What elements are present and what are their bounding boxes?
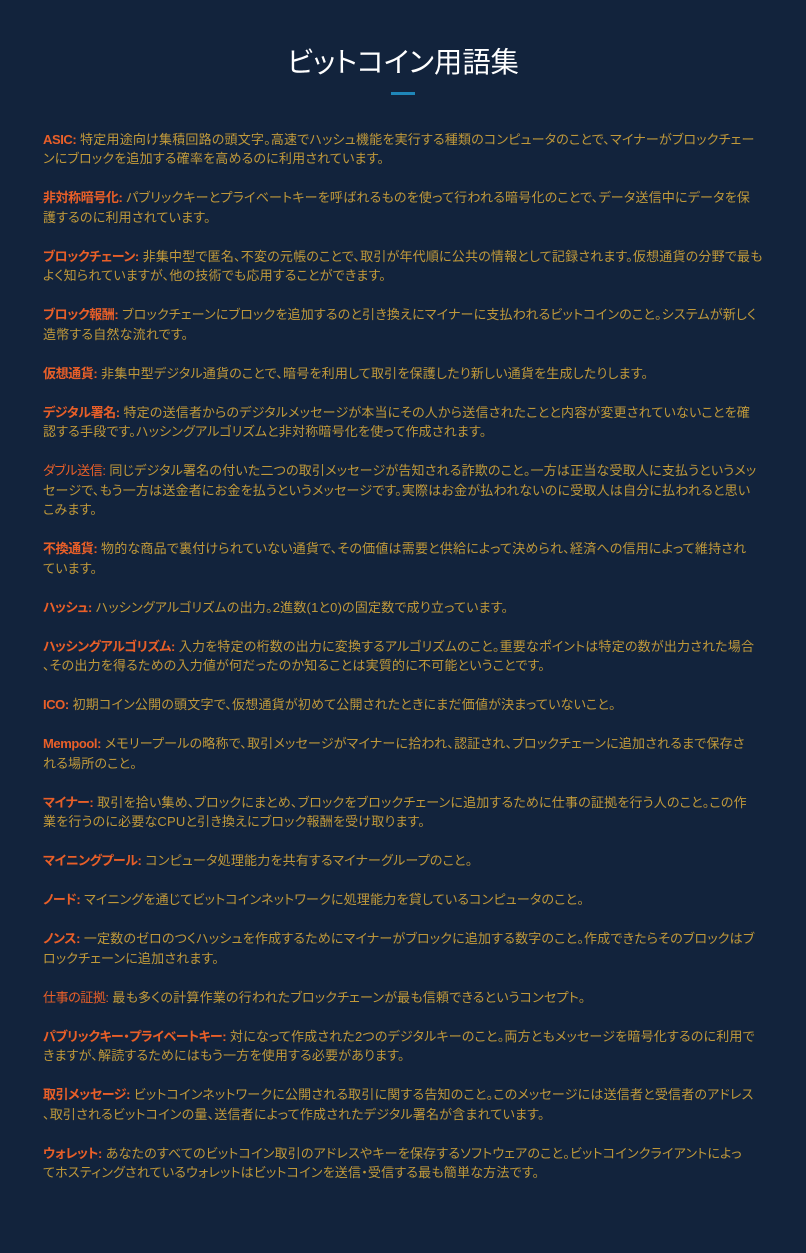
entry: Mempool: Mempool: メモリープールの略称で、取引メッセージがマイナーに拾われ、認証され、ブロックチェーンに追加されるまで保存さ	[43, 736, 745, 751]
entry: ASIC	[43, 132, 755, 166]
entry: ブロック報酬: ブロック報酬: ブロックチェーンにブロックを追加するのと引き換えにマイナーに支払われるビットコインのこと。システムが新しく	[43, 307, 756, 322]
entry: ウォレット	[43, 1146, 742, 1180]
entry: 不換通貨	[43, 541, 746, 576]
entry: パブリックキー・プライベートキー	[43, 1029, 755, 1063]
entry: デジタル署名	[43, 405, 750, 439]
entry: パブリックキー・プライベートキー: パブリックキー・プライベートキー: 対になって作成された2つのデジタルキーのこと。両方ともメッセージを暗号化するのに利用で	[43, 1029, 755, 1044]
entry: 仕事の証拠: 仕事の証拠: 最も多くの計算作業の行われたブロックチェーンが最も信頼できるというコンセプト。	[43, 990, 585, 1005]
entry: ハッシングアルゴリズム: 、その出力を得るための入力値が何だったのか知ることは実質的に不可能ということです。	[43, 658, 545, 673]
entry: Mempool	[43, 736, 745, 771]
entry: ノンス: ノンス: 一定数のゼロのつくハッシュを作成するためにマイナーがブロックに追加する数字のこと。作成できたらそのブロックはブ	[43, 931, 754, 946]
entry: ダブル送信: ダブル送信: 同じデジタル署名の付いた二つの取引メッセージが告知される詐欺のこと。一方は正当な受取人に支払うというメッ	[43, 463, 756, 478]
entry: Mempool: れる場所のこと。	[43, 756, 137, 771]
entry: 取引メッセージ: 、取引されるビットコインの量、送信者によって作成されたデジタル署名が含まれています。	[43, 1107, 545, 1122]
entry: ブロック報酬: 造幣する自然な流れです。	[43, 327, 188, 342]
entry: ダブル送信: こみます。	[43, 502, 97, 517]
entry: 不換通貨: 不換通貨: 物的な商品で裏付けられていない通貨で、その価値は需要と供給によって決められ、経済への信用によって維持され	[43, 541, 746, 556]
entry: 取引メッセージ	[43, 1087, 754, 1122]
entry: 取引メッセージ: 取引メッセージ: ビットコインネットワークに公開される取引に関する告知のこと。このメッセージには送信者と受信者のアドレス	[43, 1087, 754, 1102]
entry: パブリックキー・プライベートキー: きますが、解読するためにはもう一方を使用する必要があります。	[43, 1048, 405, 1063]
glossary list	[43, 132, 763, 1180]
entry: ハッシングアルゴリズム: ハッシングアルゴリズム: 入力を特定の桁数の出力に変換するアルゴリズムのこと。重要なポイントは特定の数が出力された場合	[43, 639, 754, 654]
title: ビットコイン用語集	[287, 40, 519, 81]
entry: ウォレット: ウォレット: あなたのすべてのビットコイン取引のアドレスやキーを保存するソフトウェアのこと。ビットコインクライアントによっ	[43, 1146, 742, 1161]
entry: マイナー	[43, 795, 747, 829]
entry: マイナー: 業を行うのに必要なCPUと引き換えにブロック報酬を受け取ります。	[43, 814, 425, 829]
entry: マイナー: マイナー: 取引を拾い集め、ブロックにまとめ、ブロックをブロックチェーンに追加するために仕事の証拠を行う人のこと。この作	[43, 795, 747, 810]
entry: ブロックチェーン: よく知られていますが、他の技術でも応用することができます。	[43, 268, 386, 283]
entry: 非対称暗号化: 非対称暗号化: パブリックキーとプライベートキーを呼ばれるものを使って行われる暗号化のことで、データ送信中にデータを保	[43, 190, 750, 205]
entry: ノード: ノード: マイニングを通じてビットコインネットワークに処理能力を貸しているコンピュータのこと。	[43, 892, 584, 907]
entry: ASIC: ASIC: 特定用途向け集積回路の頭文字。高速でハッシュ機能を実行する種類のコンピュータのことで、マイナーがブロックチェー	[43, 132, 755, 147]
entry: ASIC: ンにブロックを追加する確率を高めるのに利用されています。	[43, 151, 384, 166]
entry: ブロックチェーン: ブロックチェーン: 非集中型で匿名、不変の元帳のことで、取引が年代順に公共の情報として記録されます。仮想通貨の分野で最も	[43, 249, 763, 264]
entry: ノンス	[43, 931, 755, 966]
entry: ダブル送信: セージで、もう一方は送金者にお金を払うというメッセージです。実際はお金が払われないのに受取人は自分に払われると思い	[43, 483, 750, 498]
entry: デジタル署名: 認する手段です。ハッシングアルゴリズムと非対称暗号化を使って作成されます。	[43, 424, 486, 439]
entry: デジタル署名: デジタル署名: 特定の送信者からのデジタルメッセージが本当にその人から送信されたことと内容が変更されていないことを確	[43, 405, 750, 420]
entry: マイニングプール: マイニングプール: コンピュータ処理能力を共有するマイナーグループのこと。	[43, 853, 472, 868]
entry: ブロックチェーン	[43, 249, 763, 283]
title underline accent	[391, 92, 415, 95]
entry: 非対称暗号化: 護するのに利用されています。	[43, 210, 211, 225]
entry: ノンス: ロックチェーンに追加されます。	[43, 951, 219, 966]
entry: ICO: ICO: 初期コイン公開の頭文字で、仮想通貨が初めて公開されたときにまだ価値が決まっていないこと。	[43, 697, 616, 712]
entry: ハッシングアルゴリズム	[43, 639, 754, 673]
entry: 非対称暗号化	[43, 190, 750, 225]
entry: ハッシュ: ハッシュ: ハッシングアルゴリズムの出力。2進数(1と0)の固定数で成り立っています。	[43, 600, 508, 615]
entry: ブロック報酬	[43, 307, 756, 342]
entry: 不換通貨: ています。	[43, 561, 97, 576]
entry: ウォレット: てホスティングされているウォレットはビットコインを送信・受信する最も簡単な方法です。	[43, 1165, 539, 1180]
entry: 仮想通貨: 仮想通貨: 非集中型デジタル通貨のことで、暗号を利用して取引を保護したり新しい通貨を生成したりします。	[43, 366, 648, 381]
entry: ダブル送信	[43, 463, 756, 517]
